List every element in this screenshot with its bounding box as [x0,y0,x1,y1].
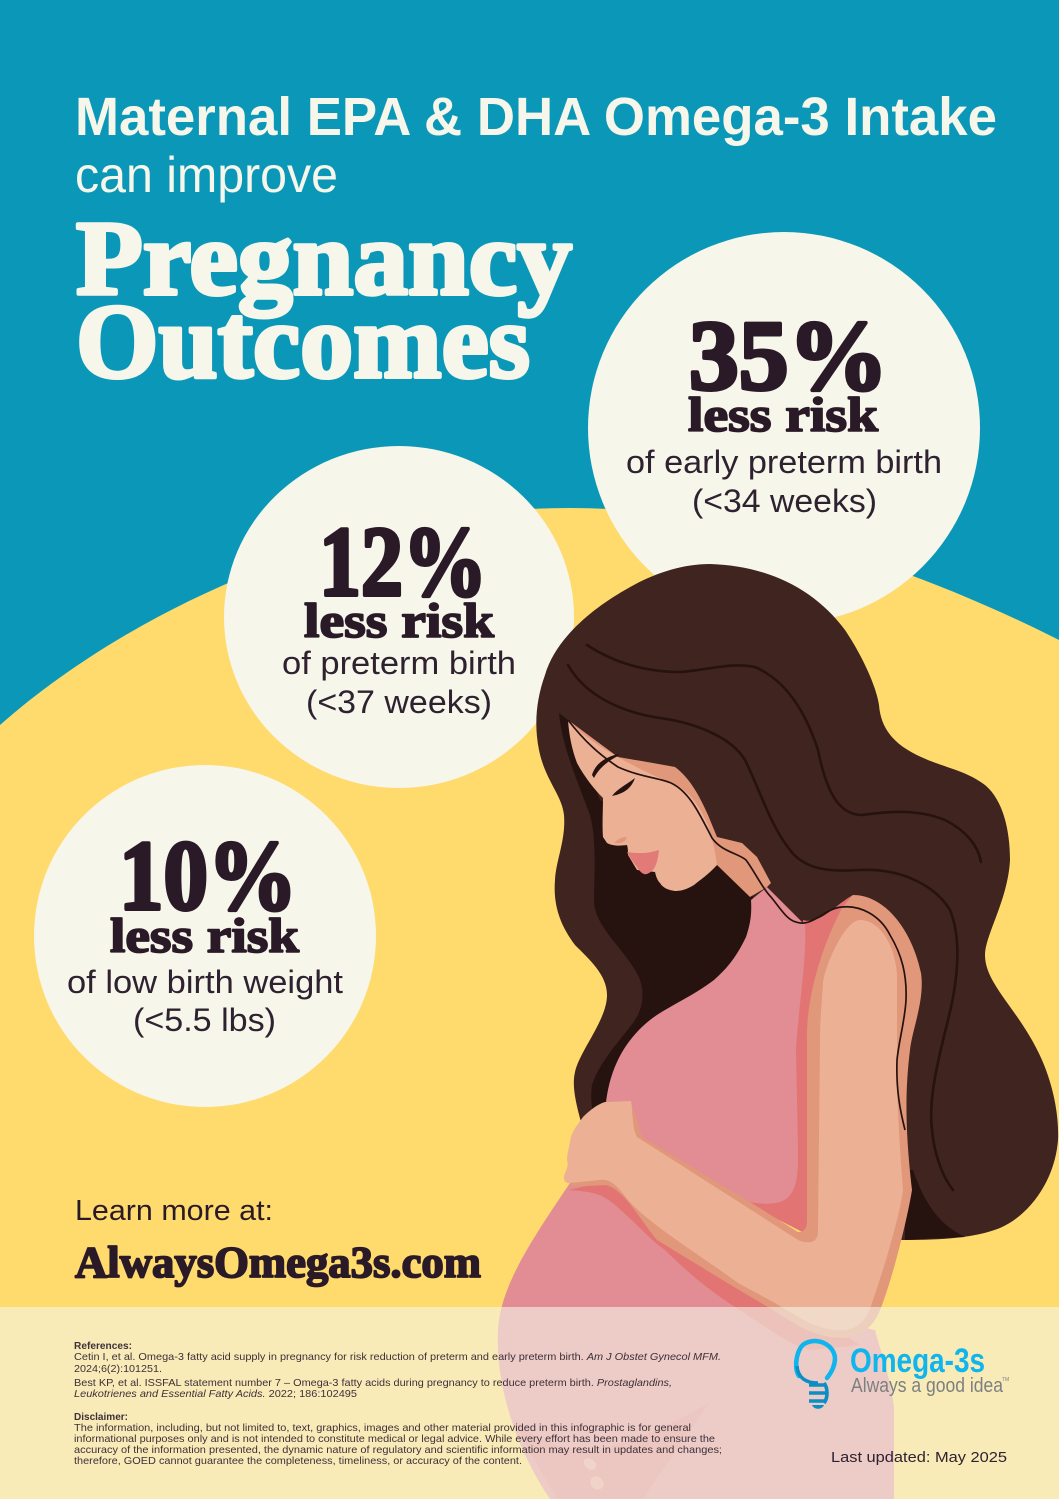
references heading: References: [74,1341,132,1352]
neck and hairline shadow [568,720,771,897]
stat range: (<34 weeks) [692,483,877,519]
disclaimer line 3: accuracy of the information presented, the dynamic nature of regulatory and scientific information may result in updates and changes; [74,1445,722,1456]
stat unit: less risk [304,593,495,648]
stat description: of low birth weight [67,964,343,1000]
title line 3: Pregnancy [76,200,572,317]
arm shadow [569,895,922,1338]
references [74,1341,721,1400]
hair strand middle [568,665,957,1190]
arm and hand [564,920,903,1330]
footer band [0,1307,1059,1499]
reference 2 continued: Leukotrienes and Essential Fatty Acids. 2022; 186:102495 [74,1389,357,1400]
stat description: of early preterm birth [626,444,942,480]
reference 2: Best KP, et al. ISSFAL statement number 7 – Omega-3 fatty acids during pregnancy to reduce preterm birth. Prostaglandins, [74,1378,672,1389]
illustration: pregnant woman [498,564,1058,1499]
belly [498,1180,894,1499]
website: AlwaysOmega3s.com [75,1238,481,1287]
lower hand [513,1403,709,1499]
logo tagline: Always a good idea [851,1375,1004,1397]
trademark: TM [1002,1377,1009,1383]
background: yellow hill [0,508,1059,1499]
hair shadow behind neck [559,713,760,1125]
title line 1: Maternal EPA & DHA Omega-3 Intake [75,87,997,147]
face [568,720,717,891]
hair silhouette [536,564,1058,1240]
stat value: 12% [319,506,487,617]
disclaimer heading: Disclaimer: [74,1412,128,1423]
disclaimer line 2: informational purposes only and is not intended to constitute medical or legal advice. While every effort has been made to ensure the [74,1434,715,1445]
stat circle: 35% [588,232,980,624]
title [75,87,997,400]
learn more label: Learn more at: [75,1195,273,1227]
icon: light bulb [796,1341,835,1409]
dress shadow [700,895,860,1240]
last updated: Last updated: May 2025 [831,1449,1007,1466]
logo: Omega-3s [796,1341,1009,1409]
hair shadow lower right [905,1170,965,1240]
logo wordmark: Omega-3s [850,1342,985,1380]
stat circle: 12% [224,446,574,788]
hair strand along face and shoulder [568,720,906,1130]
stat unit: less risk [688,387,879,442]
stat value: 35% [689,300,888,411]
stat unit: less risk [110,908,300,963]
stat range: (<37 weeks) [306,684,492,720]
lips [627,850,659,874]
closed eye [612,778,635,796]
nostril shade [614,837,627,843]
title line 4: Outcomes [76,283,530,400]
hair strand upper [587,645,981,862]
stat description: of preterm birth [282,645,516,681]
learn more callout [75,1195,481,1287]
dress [605,887,805,1204]
stat value: 10% [119,820,297,931]
disclaimer line 4: therefore, GOED cannot guarantee the completeness, timeliness, or accuracy of the content. [74,1456,522,1467]
reference 1: Cetin I, et al. Omega-3 fatty acid supply in pregnancy for risk reduction of preterm and early preterm birth. Am J Obstet Gynecol MFM. [74,1352,721,1363]
stat circle: 10% [34,765,376,1107]
title line 2: can improve [75,147,338,203]
stat range: (<5.5 lbs) [133,1002,276,1038]
reference 1 continued: 2024;6(2):101251. [74,1364,162,1375]
eyebrow [592,754,618,778]
lower hand fingers [581,1456,606,1492]
belly shadow band [569,1180,860,1350]
disclaimer line 1: The information, including, but not limited to, text, graphics, images and other material provided in this infographic is for general [74,1423,691,1434]
disclaimer [74,1412,722,1467]
